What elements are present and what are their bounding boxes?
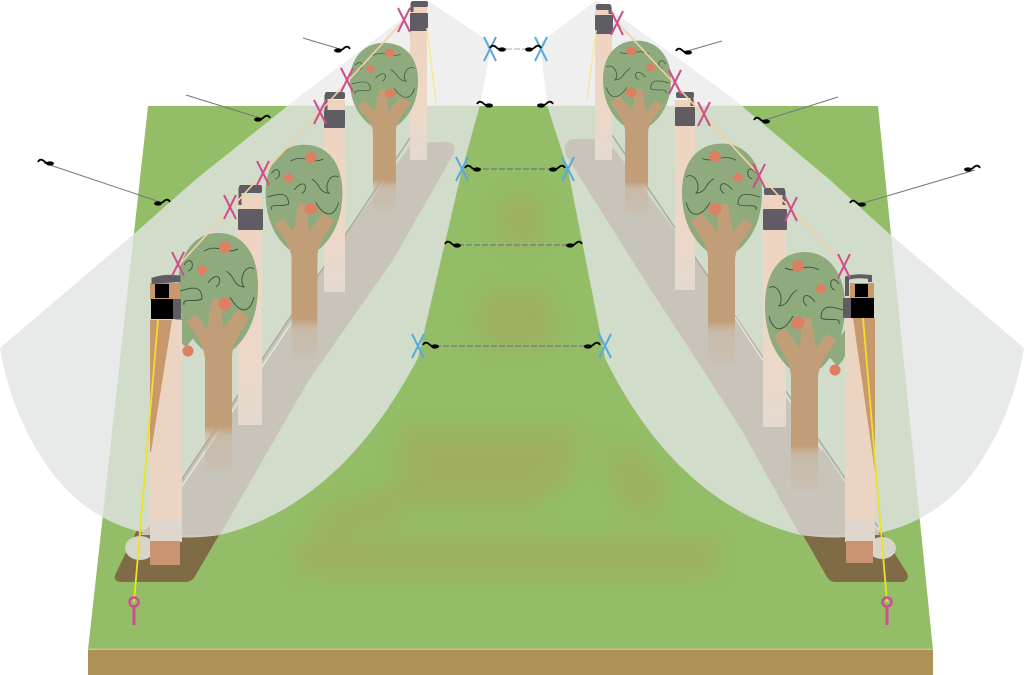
worn patches on grass	[295, 195, 720, 575]
top wires left	[178, 20, 436, 266]
top wires right	[587, 22, 844, 266]
soil band	[88, 648, 933, 675]
front post left	[150, 276, 182, 565]
ground anchor right	[882, 598, 892, 625]
tree left middle	[266, 145, 342, 359]
soil patch left	[115, 530, 222, 582]
tree left front	[175, 233, 258, 471]
mulch strip right	[565, 139, 880, 535]
front post right	[843, 276, 875, 563]
ground anchor left	[130, 598, 138, 625]
back posts left	[238, 5, 427, 425]
net fan left	[0, 0, 490, 537]
blue markers	[412, 37, 611, 358]
cross lines	[435, 49, 590, 346]
net fan right	[541, 0, 1024, 537]
side tension lines	[44, 38, 975, 204]
mulch strip left	[140, 142, 455, 535]
tree right front	[765, 252, 848, 490]
back posts right	[595, 5, 786, 427]
pink markers	[172, 8, 850, 278]
tree right middle	[682, 144, 762, 363]
fence rail lines	[150, 135, 878, 527]
anchor base left	[125, 536, 155, 560]
tree left back	[350, 43, 418, 212]
hooks	[38, 46, 980, 349]
anchor base right	[868, 537, 896, 559]
field	[88, 106, 933, 650]
post caps	[238, 1, 787, 230]
guy wire right	[863, 318, 887, 602]
soil patch right	[800, 530, 908, 582]
upper net highlight	[250, 0, 780, 105]
tree right back	[603, 41, 671, 214]
guy wire left	[134, 320, 158, 602]
